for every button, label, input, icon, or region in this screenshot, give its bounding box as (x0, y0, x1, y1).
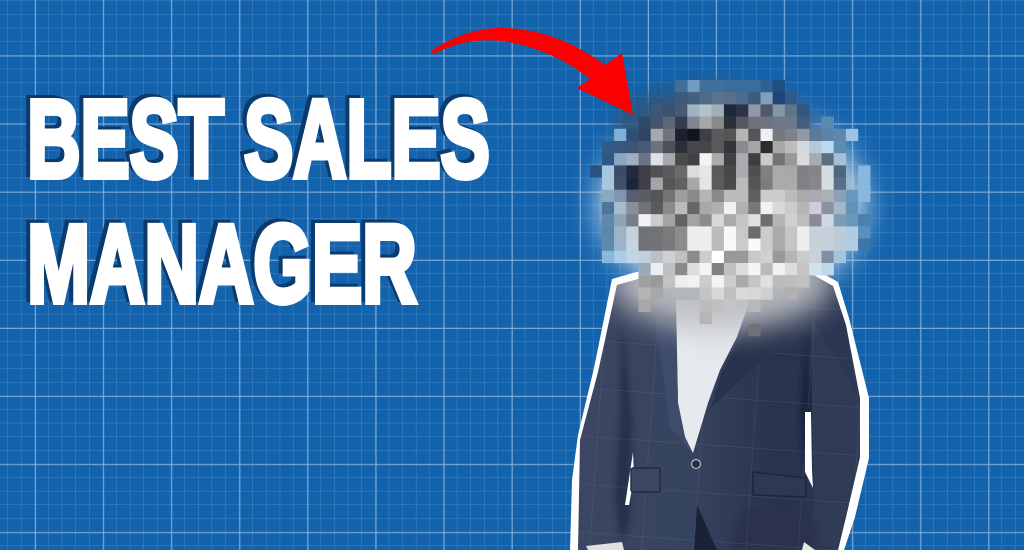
jacket opening (694, 505, 717, 550)
right shirt cuff (802, 542, 815, 550)
light halo (600, 110, 864, 300)
shirt (676, 300, 750, 453)
title shadow (23, 75, 486, 323)
title: best sales manager (23, 75, 490, 326)
person in suit (570, 230, 870, 550)
left lapel (655, 315, 692, 452)
title text: BEST SALES (27, 78, 490, 201)
white cutout outline (570, 254, 869, 550)
arrow: red curved arrow pointing to head (431, 28, 633, 115)
left sleeve seam shadow (615, 320, 632, 545)
jacket shading (578, 294, 860, 550)
right lapel (711, 320, 790, 408)
faded top of suit (610, 230, 834, 330)
title text (27, 78, 490, 326)
jacket (578, 262, 860, 550)
arm gap left (625, 452, 634, 505)
right pocket flap (753, 472, 806, 497)
glow behind pixelated head (600, 83, 864, 300)
arm gap right (805, 412, 813, 488)
dark upper haze (615, 83, 815, 167)
title shadow: MANAGER (23, 200, 413, 323)
right sleeve (812, 340, 860, 550)
button (692, 460, 700, 468)
title shadow: BEST SALES (23, 75, 486, 198)
pixelated head mosaic (590, 80, 870, 336)
left pocket flap (631, 468, 660, 492)
base of mosaic (602, 127, 858, 283)
left shirt cuff (586, 542, 624, 550)
check pattern (578, 294, 860, 550)
hand in pocket folds (734, 516, 816, 548)
title text: MANAGER (27, 203, 417, 326)
right sleeve seam shadow (800, 330, 812, 480)
